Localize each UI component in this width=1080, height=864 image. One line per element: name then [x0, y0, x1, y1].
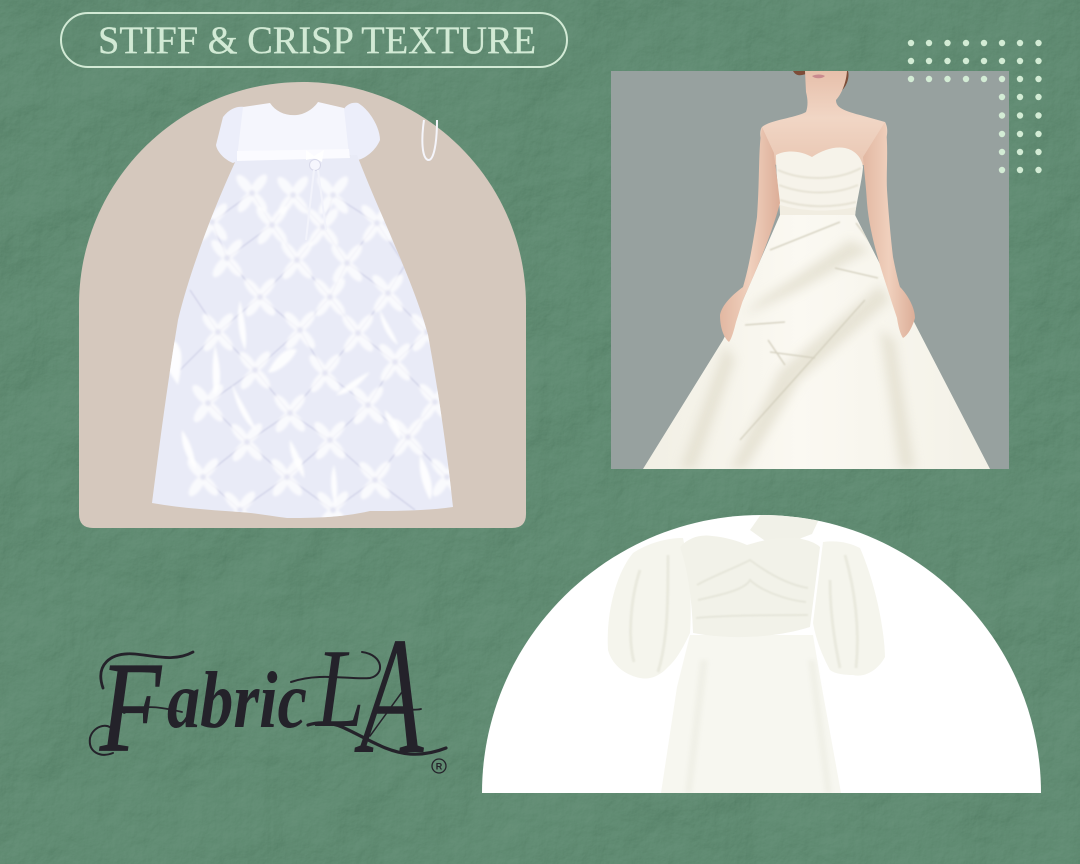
logo letter A: A	[354, 603, 424, 789]
panel: white half-arch with puff-sleeve gown	[482, 513, 1041, 793]
title pill	[61, 13, 567, 67]
fold lines	[740, 222, 885, 440]
registered mark	[432, 759, 446, 773]
bodice	[237, 102, 349, 158]
logo: FabricLA	[90, 603, 446, 789]
ribbon loop	[422, 120, 437, 160]
tuft fold lattice	[180, 193, 447, 510]
logo swashes	[90, 652, 446, 755]
sleeves	[216, 107, 244, 163]
photo: model in strapless ball gown	[611, 71, 1009, 469]
panel: christening gown arch	[79, 82, 526, 532]
waist ribbon and rose	[237, 149, 350, 161]
satin highlights	[168, 300, 432, 505]
right puff sleeve	[813, 541, 885, 676]
face and neck	[760, 71, 887, 165]
back strap	[750, 515, 818, 540]
skirt	[661, 635, 841, 793]
decorative dot grid	[908, 40, 1042, 173]
tuft knots	[188, 174, 451, 518]
skirt shadows	[680, 240, 915, 469]
right arm	[863, 122, 915, 338]
gown bodice	[776, 147, 863, 215]
gown skirt	[643, 215, 990, 469]
bodice	[680, 535, 820, 637]
logo letters abric: abric	[167, 657, 307, 745]
left arm	[720, 127, 780, 342]
skirt	[152, 155, 453, 518]
logo letter L: L	[314, 627, 365, 751]
logo letter F: F	[99, 636, 163, 778]
icon: white tufted gown	[152, 102, 465, 532]
registered mark: R	[436, 762, 443, 772]
hair	[793, 71, 849, 92]
left puff sleeve	[608, 538, 691, 679]
lips	[812, 74, 825, 78]
title text: STIFF & CRISP TEXTURE	[98, 19, 536, 62]
